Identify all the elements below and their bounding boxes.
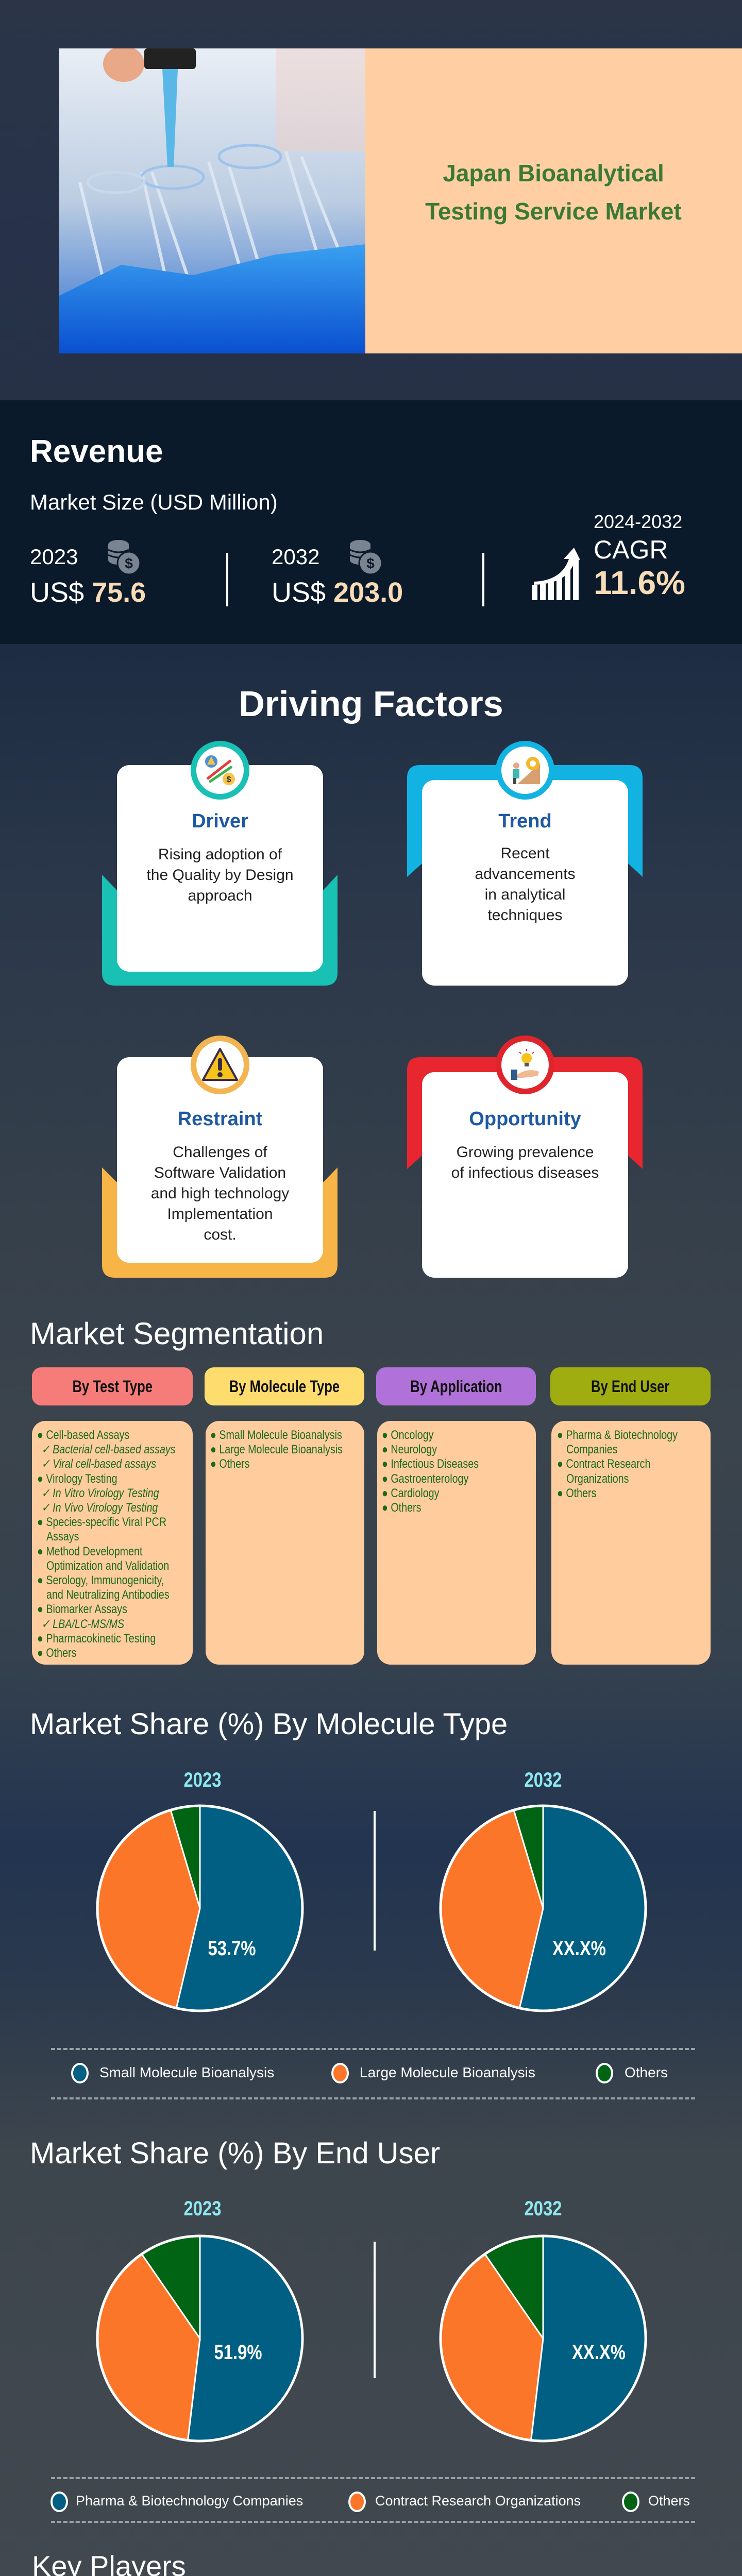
segmentation: application list: ● Cardiology: [382, 1486, 439, 1500]
panel: restraint: cost.: [204, 1226, 237, 1243]
segmentation: molecule type list: ● Small Molecule Bioanalysis: [210, 1428, 342, 1442]
CAGR block: 11.6%: [594, 564, 685, 601]
panel: restraint: [102, 1036, 338, 1278]
chart: molecule type pies: XX.X%: [552, 1937, 606, 1960]
2023 value: 2023: [30, 545, 78, 569]
header image: test tubes: [59, 48, 365, 353]
pie 2032: [440, 1805, 646, 2011]
molecule type title: Market Share (%) By Molecule Type: [30, 1707, 508, 1741]
panel: trend: Trend: [498, 810, 552, 832]
panel: trend: Recent: [500, 845, 550, 862]
chart: molecule type pies: 2023: [184, 1768, 221, 1791]
panel: driver: approach: [188, 887, 252, 904]
driving factors title: Driving Factors: [239, 684, 503, 724]
2032 value: 2032: [272, 545, 319, 569]
icon: driver: [205, 755, 235, 785]
segmentation: molecule type list: [206, 1421, 364, 1665]
segmentation: molecule type list: ● Others: [210, 1457, 249, 1471]
segmentation: test type list: ● Method Development: [37, 1545, 142, 1558]
end user title: Market Share (%) By End User: [30, 2137, 440, 2170]
legend: molecule type: Large Molecule Bioanalysis: [360, 2064, 535, 2080]
icon: coins: $: [125, 555, 133, 571]
background: lower photo overlay: [0, 644, 742, 2576]
segmentation headers: [32, 1367, 193, 1405]
chart: end user pies: 2023: [184, 2197, 221, 2220]
pie 2032: [440, 2235, 646, 2442]
2032 value: US$ 203.0: [272, 577, 403, 608]
title: Japan Bioanalytical: [443, 160, 664, 187]
segmentation: application list: ● Gastroenterology: [382, 1472, 468, 1486]
panel: opportunity: Opportunity: [469, 1108, 581, 1130]
segmentation: application list: ● Infectious Diseases: [382, 1457, 479, 1471]
panel: trend: advancements: [475, 866, 576, 883]
panel: trend: [407, 741, 643, 986]
segmentation: test type list: ● Virology Testing: [37, 1472, 117, 1486]
title: [425, 160, 682, 225]
segmentation: test type list: Optimization and Validation: [46, 1559, 169, 1573]
panel: restraint: Software Validation: [154, 1164, 286, 1181]
segmentation: test type list: [32, 1421, 193, 1665]
legend: molecule type: Others: [625, 2064, 668, 2080]
CAGR block: CAGR: [594, 535, 668, 564]
market size subtitle: Market Size (USD Million): [30, 490, 278, 514]
panel: restraint: Challenges of: [173, 1144, 267, 1161]
segmentation headers: By Test Type: [72, 1377, 153, 1395]
panel: opportunity: [407, 1036, 643, 1278]
icon: driver: $: [227, 775, 231, 784]
chart: end user pies: [96, 2197, 647, 2442]
segmentation: molecule type list: ● Large Molecule Bioanalysis: [210, 1443, 343, 1456]
legend: end user: Pharma & Biotechnology Companies: [76, 2493, 303, 2509]
segmentation: application list: ● Others: [382, 1501, 421, 1515]
legend: end user: [50, 2492, 690, 2512]
dashed divider: [51, 2048, 695, 2050]
panel: driver: Rising adoption of: [158, 846, 282, 863]
text: By Application: [410, 1377, 502, 1395]
icon: opportunity: [511, 1049, 539, 1080]
segmentation: test type list: ✓ LBA/LC-MS/MS: [41, 1617, 124, 1631]
2023 value: [30, 540, 146, 608]
icon: coins: $: [366, 555, 375, 571]
chart: molecule type pies: [96, 1768, 647, 2012]
segmentation: test type list: ● Species-specific Viral PCR: [37, 1515, 166, 1529]
segmentation: test type list: ● Cell-based Assays: [37, 1428, 129, 1442]
icon: trend: [513, 757, 540, 784]
dashed divider: [51, 2521, 695, 2523]
panel: restraint: Implementation: [167, 1206, 273, 1223]
panel: restraint: Restraint: [178, 1108, 262, 1130]
revenue band: [0, 400, 742, 644]
segmentation: test type list: Assays: [46, 1530, 79, 1544]
legend: molecule type: Small Molecule Bioanalysis: [99, 2064, 274, 2080]
legend: molecule type: [71, 2063, 668, 2083]
segmentation: end user list: ● Contract Research: [557, 1457, 650, 1471]
segmentation: end user list: Companies: [566, 1443, 618, 1456]
segmentation: test type list: ✓ Bacterial cell-based assays: [41, 1443, 176, 1456]
panel: driver: [102, 741, 338, 986]
panel: opportunity: Growing prevalence: [457, 1144, 594, 1161]
legend: end user: Contract Research Organizations: [375, 2493, 581, 2509]
2032 value: [272, 540, 403, 608]
icon: coins: [350, 540, 381, 574]
panel: opportunity: of infectious diseases: [451, 1164, 599, 1181]
divider: [482, 553, 484, 606]
segmentation: test type list: ✓ In Vivo Virology Testing: [41, 1501, 158, 1515]
chart: molecule type pies: 2032: [525, 1768, 562, 1791]
chart: end user pies: 2032: [525, 2197, 562, 2220]
segmentation: application list: ● Oncology: [382, 1428, 434, 1442]
icon: warning: [202, 1048, 238, 1081]
segmentation: end user list: [551, 1421, 711, 1665]
segmentation: application list: [377, 1421, 536, 1665]
panel: trend: techniques: [487, 907, 563, 924]
dashed divider: [51, 2477, 695, 2479]
segmentation: test type list: and Neutralizing Antibodies: [46, 1588, 170, 1602]
segmentation: end user list: Organizations: [566, 1472, 629, 1486]
panel: driver: the Quality by Design: [146, 867, 294, 884]
background: top header area: [0, 0, 742, 400]
CAGR block: [594, 511, 685, 601]
2023 value: US$ 75.6: [30, 577, 146, 608]
segmentation: test type list: ✓ In Vitro Virology Testing: [41, 1486, 159, 1500]
panel: restraint: and high technology: [151, 1185, 289, 1202]
header title panel: [365, 48, 742, 353]
chart: molecule type pies: 53.7%: [208, 1937, 256, 1960]
segmentation: test type list: ● Others: [37, 1646, 76, 1660]
segmentation: end user list: ● Pharma & Biotechnology: [557, 1428, 678, 1442]
panel: trend: in analytical: [485, 886, 565, 903]
market segmentation title: Market Segmentation: [30, 1316, 324, 1351]
segmentation: application list: ● Neurology: [382, 1443, 437, 1456]
title: Testing Service Market: [425, 198, 682, 225]
dashed divider: [51, 2097, 695, 2099]
segmentation: test type list: ✓ Viral cell-based assays: [41, 1457, 156, 1471]
panel: driver: Driver: [192, 810, 248, 832]
legend: end user: Others: [648, 2493, 690, 2509]
divider: [226, 553, 228, 606]
pie 2023: [97, 1805, 303, 2011]
CAGR block: 2024-2032: [594, 511, 682, 532]
segmentation: test type list: ● Pharmacokinetic Testing: [37, 1632, 156, 1646]
icon: growth arrow: [532, 548, 580, 600]
revenue heading: Revenue: [30, 434, 163, 469]
chart: end user pies: 51.9%: [214, 2341, 262, 2364]
icon: coins: [108, 540, 139, 574]
pie 2023: [97, 2235, 303, 2442]
text: By End User: [591, 1377, 670, 1395]
text: By Molecule Type: [229, 1377, 340, 1395]
segmentation: test type list: ● Serology, Immunogenicity,: [37, 1573, 164, 1587]
segmentation: end user list: ● Others: [557, 1486, 596, 1500]
segmentation: test type list: ● Biomarker Assays: [37, 1602, 127, 1616]
chart: end user pies: XX.X%: [572, 2341, 626, 2364]
